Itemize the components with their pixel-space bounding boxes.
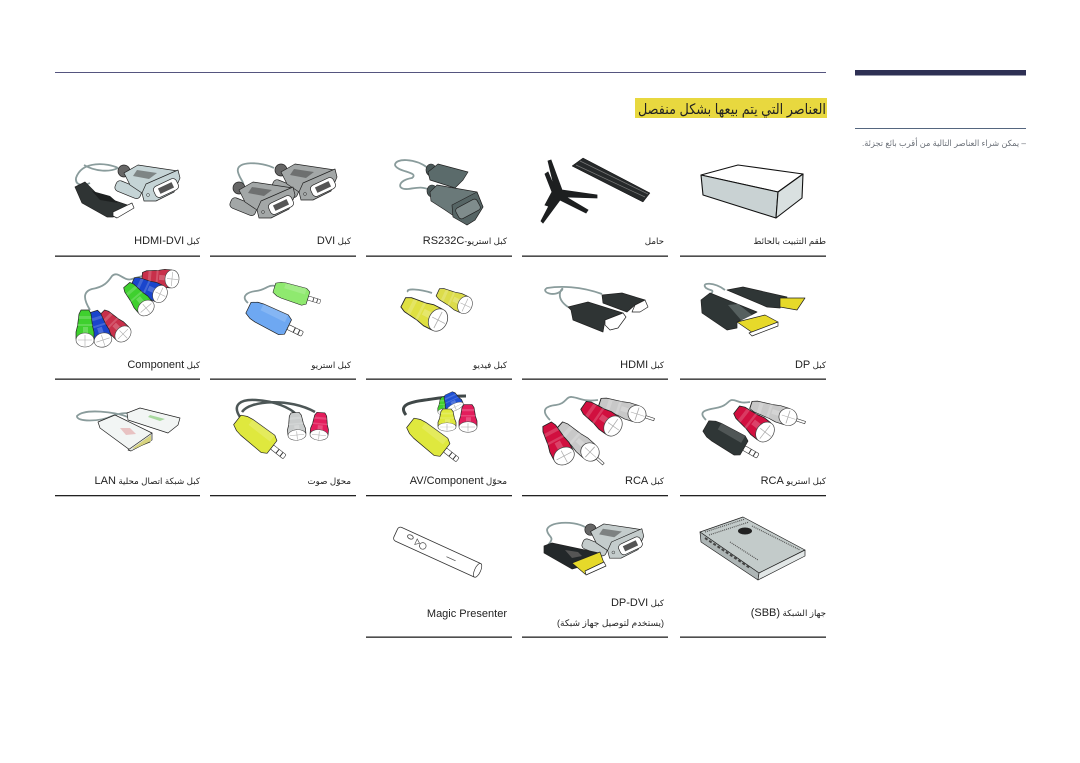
- item: HDMI-DVI cable: [55, 164, 201, 257]
- label: كبل فيديو: [472, 360, 508, 370]
- item: audio adapter: [210, 400, 356, 496]
- label: كبل DVI: [317, 235, 352, 247]
- label: محوّل AV/Component: [410, 475, 507, 487]
- title: items sold separately: العناصر التي يتم بيعها بشكل منفصل: [638, 102, 826, 118]
- item: SBB network device: [680, 517, 826, 638]
- item: DP cable: [680, 284, 827, 380]
- label: حامل: [645, 236, 664, 246]
- item: AV/Component adapter: [366, 390, 512, 496]
- label: كبل HDMI-DVI: [134, 235, 201, 247]
- label: كبل DP-DVI: [611, 597, 665, 609]
- item: RCA cable: [522, 394, 668, 496]
- sidebar heading bar: [855, 70, 1026, 76]
- item: stereo cable: [210, 279, 356, 380]
- label: كبل Component: [127, 359, 201, 371]
- label: كبل استريو-RS232C: [423, 235, 508, 247]
- sidebar note: – يمكن شراء العناصر التالية من أقرب بائع تجزئة.: [862, 137, 1026, 148]
- top rule: [55, 72, 826, 73]
- note: (يستخدم لتوصيل جهاز شبكة): [557, 618, 664, 628]
- label: كبل استريو RCA: [761, 475, 827, 487]
- item: DP-DVI cable: [522, 523, 668, 638]
- item: video cable: [366, 284, 512, 380]
- item: Magic Presenter remote: [366, 526, 512, 638]
- label: كبل استريو: [310, 360, 352, 370]
- item: DVI cable: [210, 163, 356, 257]
- item: HDMI cable: [522, 287, 668, 380]
- label: كبل HDMI: [620, 359, 665, 371]
- item: LAN cable: [55, 408, 201, 496]
- sidebar rule: [855, 128, 1026, 129]
- item: component cable: [55, 267, 201, 380]
- label: طقم التثبيت بالحائط: [753, 236, 826, 247]
- label: محوّل صوت: [307, 476, 351, 486]
- item: RS232C stereo cable: [366, 160, 512, 257]
- label: جهاز الشبكة (SBB): [751, 607, 826, 619]
- item: wall mount kit: [680, 165, 826, 257]
- label: Magic Presenter: [427, 608, 507, 620]
- item: RCA stereo cable: [680, 397, 827, 496]
- label: كبل RCA: [625, 475, 665, 487]
- label: كبل شبكة اتصال محلية LAN: [94, 475, 201, 487]
- item: stand: [522, 158, 668, 257]
- label: كبل DP: [795, 359, 827, 371]
